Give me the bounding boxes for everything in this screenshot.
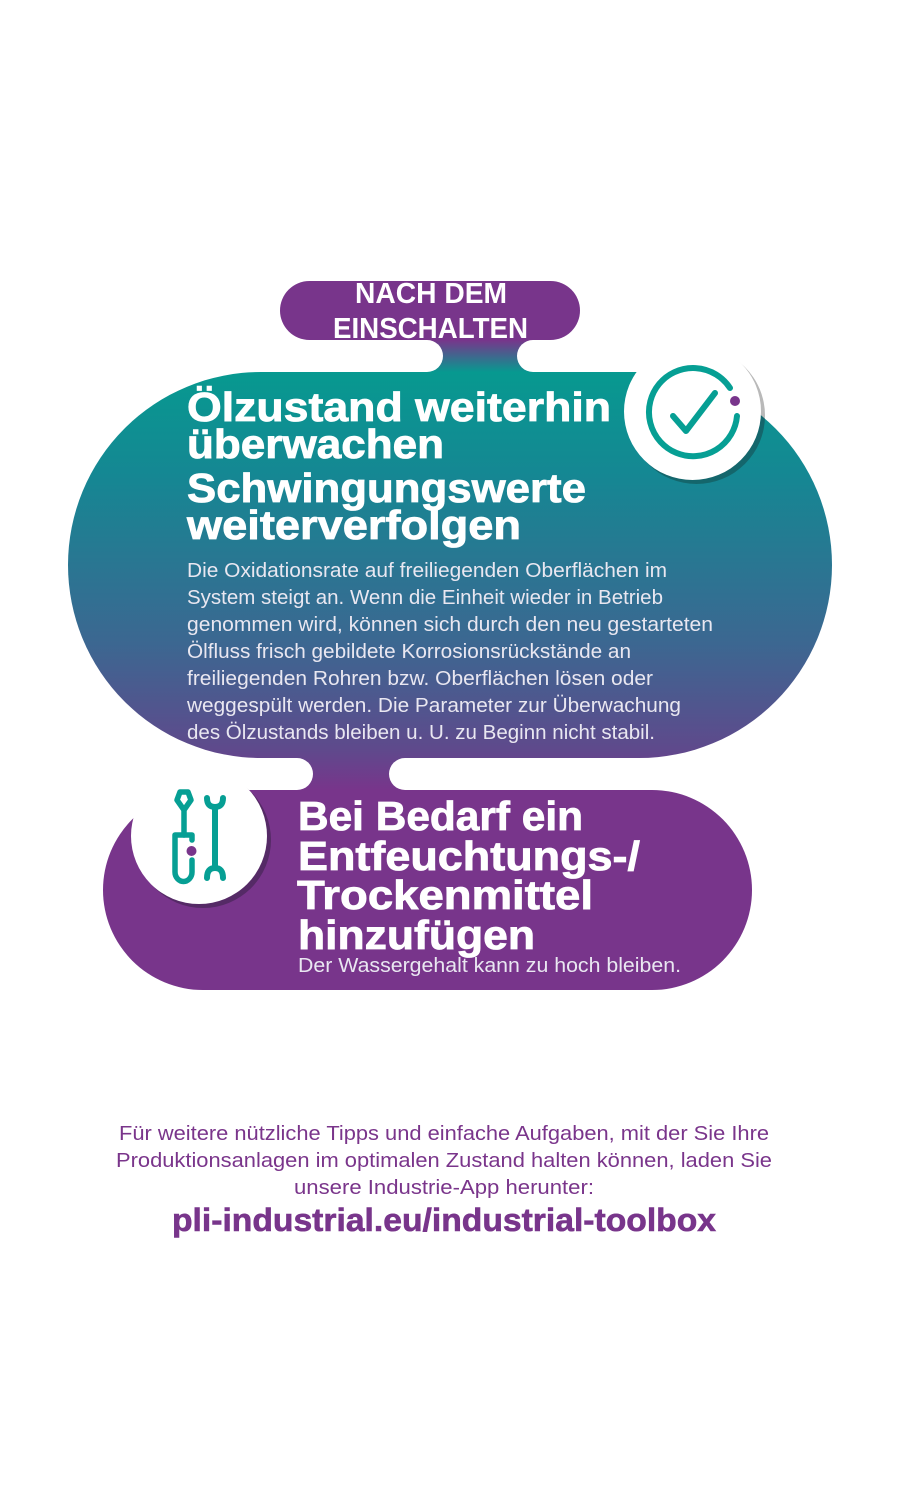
text block: teal panel body: [186, 560, 713, 744]
icon: wrench: [207, 798, 223, 878]
text block: teal panel body: Ölfluss frisch gebildete Korrosionsrückstände an: [187, 641, 631, 663]
icon: tools badge: [131, 758, 282, 908]
heading: purple panel heading: [297, 793, 640, 958]
connector: teal panel to purple panel: [240, 756, 462, 792]
heading: teal panel headings: Schwingungswerte: [187, 465, 586, 511]
pill heading: NACH DEM: [355, 278, 507, 310]
icon: check mark badge: [624, 343, 765, 484]
link: toolbox URL: pli-industrial.eu/industrial-toolbox: [172, 1202, 716, 1238]
text block: footer note: unsere Industrie-App herunter:: [294, 1176, 594, 1199]
panel: purple lower panel: [103, 790, 752, 990]
text block: teal panel body: System steigt an. Wenn die Einheit wieder in Betrieb: [187, 587, 663, 609]
text block: teal panel body: des Ölzustands bleiben u. U. zu Beginn nicht stabil.: [187, 722, 655, 744]
heading: purple panel heading: hinzufügen: [298, 912, 535, 958]
heading: teal panel headings: Ölzustand weiterhin: [187, 384, 611, 430]
text block: footer note: Für weitere nützliche Tipps und einfache Aufgaben, mit der Sie Ihre: [119, 1122, 769, 1145]
infographic canvas: [68, 281, 832, 1238]
connector: pill to teal panel: [395, 338, 565, 374]
heading: purple panel heading: Bei Bedarf ein: [298, 793, 583, 839]
text block: teal panel body: weggespült werden. Die Parameter zur Überwachung: [186, 695, 681, 717]
heading: purple panel heading: Entfeuchtungs-/: [298, 833, 640, 879]
text block: teal panel body: freiliegenden Rohren bzw. Oberflächen lösen oder: [187, 668, 653, 690]
decorative grey badge shadow: [628, 347, 765, 484]
text block: footer note: [116, 1122, 772, 1199]
panel: teal gradient main panel: [68, 372, 832, 758]
text block: purple panel body: Der Wassergehalt kann zu hoch bleiben.: [298, 955, 681, 977]
heading: purple panel heading: Trockenmittel: [297, 872, 593, 918]
text block: footer note: Produktionsanlagen im optimalen Zustand halten können, laden Sie: [116, 1149, 772, 1172]
text block: teal panel body: Die Oxidationsrate auf freiliegenden Oberflächen im: [187, 560, 667, 582]
heading: teal panel headings: weiterverfolgen: [186, 502, 521, 548]
heading: teal panel headings: überwachen: [187, 421, 444, 467]
text block: teal panel body: genommen wird, können sich durch den neu gestarteten: [187, 614, 713, 636]
icon: screwdriver: [175, 792, 192, 882]
pill heading: EINSCHALTEN: [333, 313, 528, 345]
panel: top pill with heading: [280, 278, 580, 345]
pill heading: [333, 278, 528, 345]
heading: teal panel headings: [186, 384, 611, 548]
